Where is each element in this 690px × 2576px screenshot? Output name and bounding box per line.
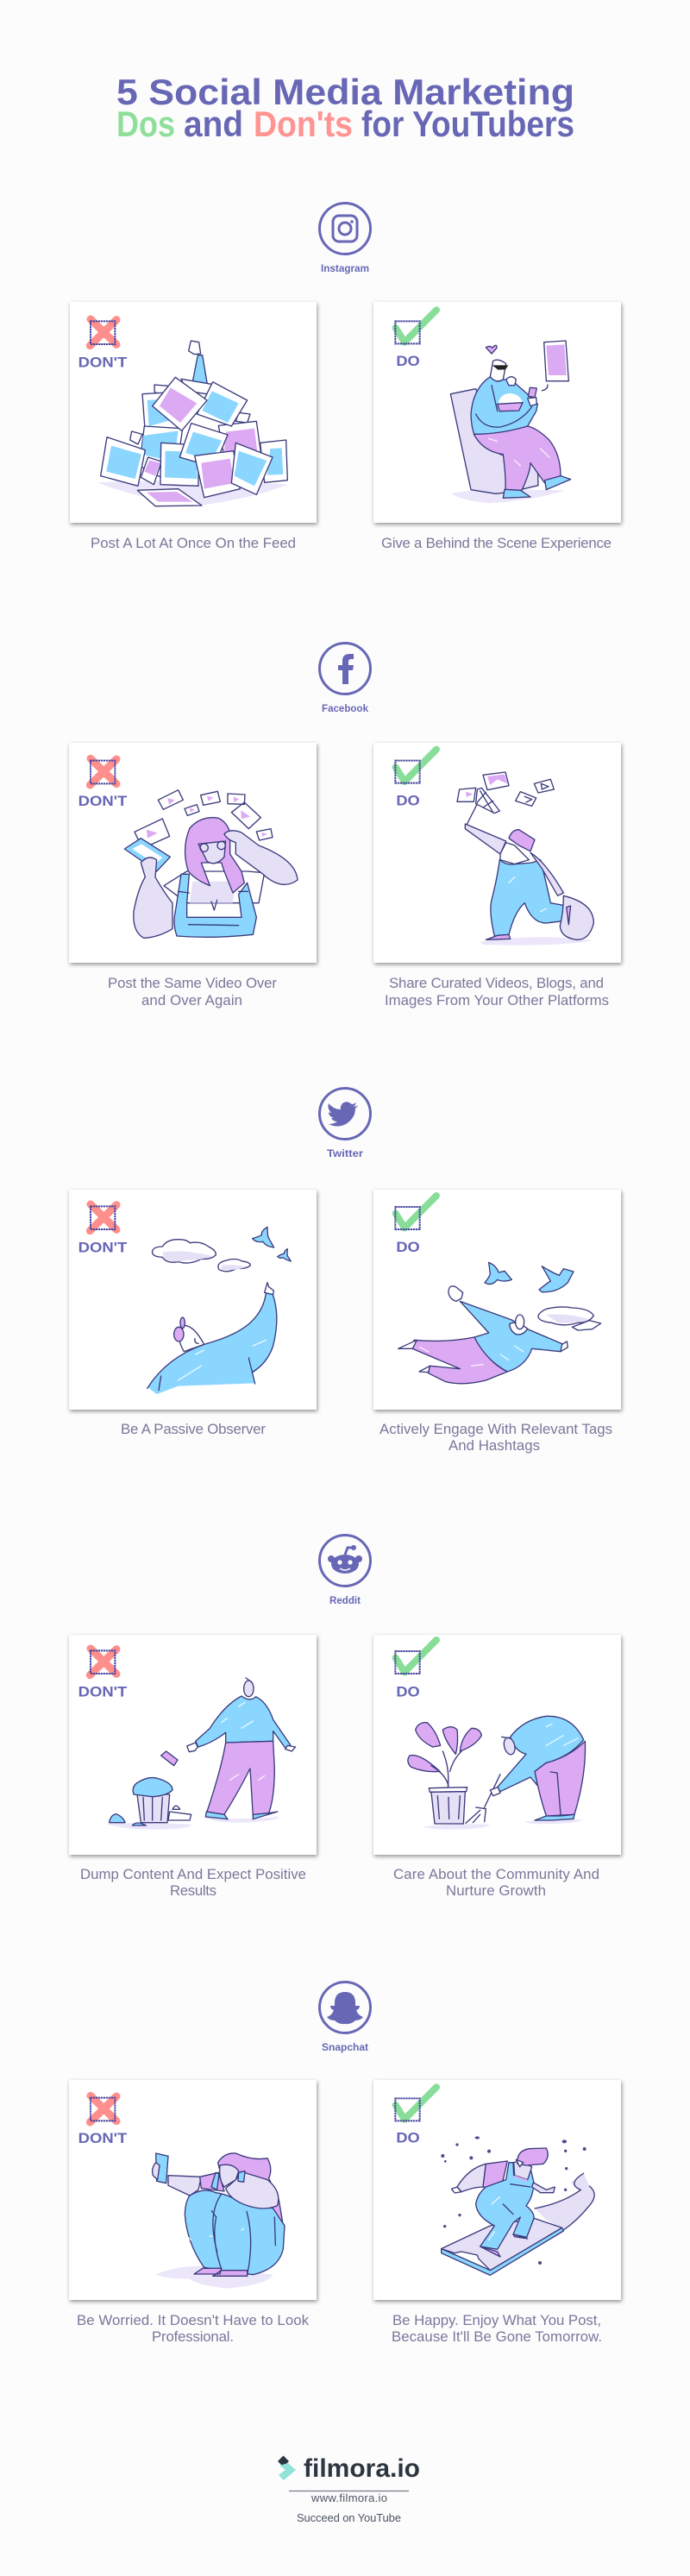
caption bbox=[380, 1421, 612, 1454]
title: Dos bbox=[116, 104, 175, 144]
badge: don't: DON'T bbox=[78, 2130, 127, 2146]
illustration: woman overwhelmed by videos bbox=[124, 790, 298, 938]
caption: Dump Content And Expect Positive bbox=[80, 1866, 306, 1882]
badge: don't bbox=[78, 758, 127, 809]
caption: Actively Engage With Relevant Tags bbox=[380, 1421, 612, 1437]
tagline: Succeed on YouTube bbox=[297, 2511, 401, 2524]
title: 5 Social Media Marketing bbox=[116, 72, 574, 112]
icon: Facebook bbox=[319, 644, 371, 694]
badge: do bbox=[395, 1196, 436, 1255]
label: Reddit: Reddit bbox=[329, 1594, 361, 1606]
title: Don'ts bbox=[254, 104, 353, 144]
badge: do bbox=[395, 1640, 436, 1700]
badge: don't bbox=[78, 2095, 127, 2146]
footer: filmora logo and tagline bbox=[278, 2454, 420, 2524]
caption bbox=[108, 975, 277, 1008]
caption: Be Happy. Enjoy What You Post, bbox=[392, 2312, 601, 2328]
badge: do: DO bbox=[396, 1683, 420, 1700]
title: and bbox=[184, 104, 243, 144]
caption: Share Curated Videos, Blogs, and bbox=[389, 975, 604, 991]
panel: Twitter don't bbox=[69, 1190, 317, 1437]
illustration: flying man with birds bbox=[398, 1262, 601, 1384]
label: Instagram: Instagram bbox=[321, 262, 369, 274]
section: Reddit heading bbox=[319, 1536, 371, 1606]
section: Facebook heading bbox=[319, 644, 371, 714]
illustration: pile of posts bbox=[97, 341, 287, 506]
caption: And Hashtags bbox=[448, 1437, 540, 1454]
illustration: man on chair with popcorn bbox=[450, 341, 571, 503]
illustration: surfing on a phone bbox=[441, 2136, 594, 2275]
logo wordmark: filmora.io bbox=[304, 2454, 420, 2483]
badge: don't: DON'T bbox=[78, 1240, 127, 1256]
label: Twitter: Twitter bbox=[327, 1147, 363, 1159]
panel: Snapchat do bbox=[373, 2080, 621, 2345]
panel: Reddit do bbox=[373, 1635, 621, 1899]
panel: Facebook do bbox=[373, 743, 621, 1008]
icon: Reddit bbox=[319, 1536, 371, 1586]
caption: Images From Your Other Platforms bbox=[385, 992, 609, 1008]
section: Snapchat heading bbox=[319, 1982, 371, 2053]
section: Twitter heading bbox=[319, 1089, 371, 1159]
panel: Snapchat don't bbox=[69, 2080, 317, 2345]
caption: Be Worried. It Doesn't Have to Look bbox=[77, 2312, 310, 2328]
label: Facebook: Facebook bbox=[322, 702, 368, 714]
illustration: worried woman with phone bbox=[153, 2153, 285, 2289]
caption bbox=[392, 2312, 602, 2345]
badge: don't bbox=[78, 319, 127, 370]
caption: and Over Again bbox=[141, 992, 242, 1008]
website: www.filmora.io bbox=[310, 2491, 387, 2504]
icon: Instagram bbox=[319, 204, 371, 254]
caption: Post A Lot At Once On the Feed bbox=[91, 535, 296, 551]
panel: Facebook don't bbox=[69, 743, 317, 1008]
caption bbox=[80, 1866, 306, 1899]
title bbox=[116, 72, 574, 144]
badge: do bbox=[395, 2087, 436, 2146]
badge: do: DO bbox=[396, 2130, 420, 2146]
caption: Nurture Growth bbox=[446, 1882, 546, 1899]
badge: do: DO bbox=[396, 1239, 420, 1255]
icon: filmora logo mark bbox=[278, 2455, 296, 2480]
panel: Twitter do bbox=[373, 1190, 621, 1454]
illustration: nurturing a plant bbox=[408, 1716, 586, 1830]
badge: do bbox=[395, 310, 436, 369]
title: for YouTubers bbox=[361, 104, 574, 144]
caption bbox=[77, 2312, 310, 2345]
caption: Care About the Community And bbox=[393, 1866, 599, 1882]
badge: don't: DON'T bbox=[78, 354, 127, 370]
illustration: dumping content in bin bbox=[106, 1678, 296, 1830]
icon: Snapchat bbox=[319, 1982, 371, 2033]
badge: don't: DON'T bbox=[78, 1684, 127, 1700]
badge: do: DO bbox=[396, 353, 420, 369]
caption: Post the Same Video Over bbox=[108, 975, 277, 991]
badge: don't bbox=[78, 1204, 127, 1256]
badge: don't: DON'T bbox=[78, 793, 127, 809]
badge: do bbox=[395, 750, 436, 808]
illustration: passive observer bbox=[147, 1227, 291, 1394]
caption: Professional. bbox=[152, 2328, 234, 2345]
caption bbox=[393, 1866, 599, 1899]
badge: don't bbox=[78, 1649, 127, 1700]
caption: Results bbox=[170, 1882, 216, 1899]
caption bbox=[385, 975, 609, 1008]
badge: do: DO bbox=[396, 792, 420, 808]
section: Instagram heading bbox=[319, 204, 371, 274]
illustration: catching media with net bbox=[457, 772, 593, 946]
icon: Twitter bbox=[319, 1089, 371, 1139]
caption: Because It'll Be Gone Tomorrow. bbox=[392, 2328, 602, 2345]
caption: Be A Passive Observer bbox=[121, 1421, 266, 1437]
panel: Instagram don't bbox=[70, 302, 317, 551]
label: Snapchat: Snapchat bbox=[322, 2041, 368, 2053]
panel: Instagram do bbox=[373, 302, 621, 551]
caption: Give a Behind the Scene Experience bbox=[381, 535, 612, 551]
panel: Reddit don't bbox=[69, 1635, 317, 1899]
